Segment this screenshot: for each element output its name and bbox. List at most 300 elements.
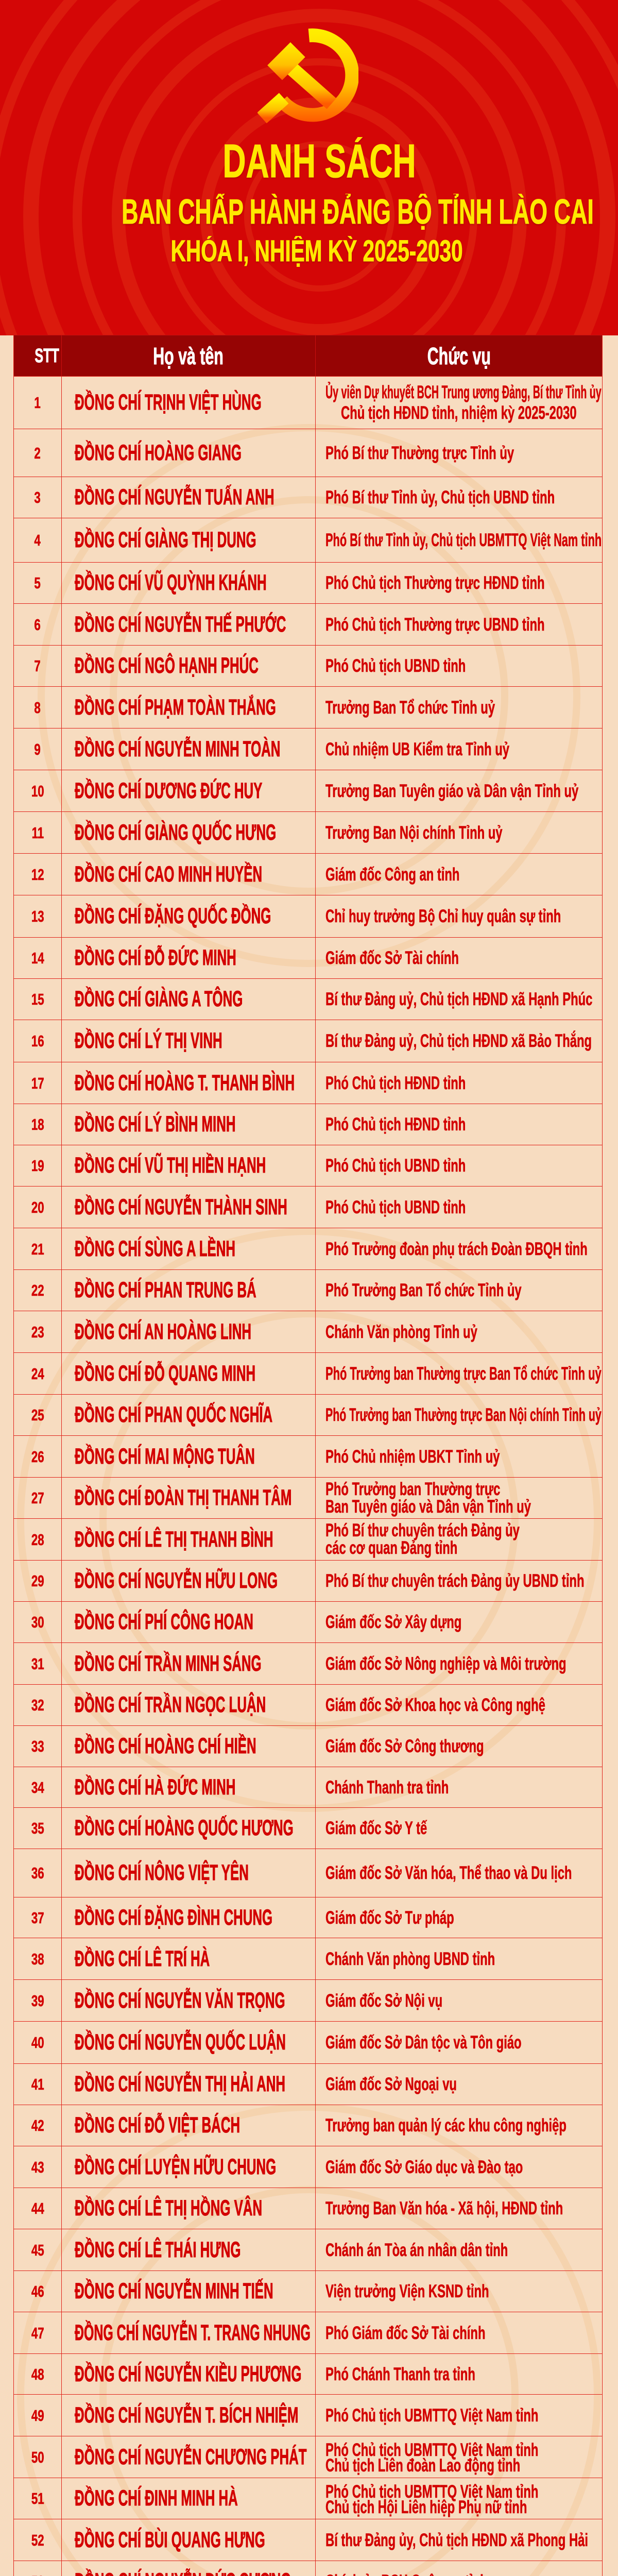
name (62, 979, 316, 1020)
stt: 16 (31, 1032, 44, 1050)
stt: 10 (31, 782, 44, 800)
row 30 (13, 1602, 603, 1643)
position: Phó Trưởng đoàn phụ trách Đoàn ĐBQH tỉnh (325, 1239, 588, 1259)
name (62, 1353, 316, 1394)
name (62, 518, 316, 562)
stt: 30 (31, 1613, 44, 1631)
stt (14, 2022, 62, 2063)
position: Phó Chủ tịch UBND tỉnh (325, 1197, 466, 1217)
name (62, 1062, 316, 1104)
stt (14, 2146, 62, 2188)
name: ĐỒNG CHÍ LÝ THỊ VINH (75, 1028, 222, 1053)
position: Giám đốc Sở Khoa học và Công nghệ (325, 1695, 545, 1715)
name (62, 1980, 316, 2021)
stt (14, 1104, 62, 1145)
position: Giám đốc Sở Dân tộc và Tôn giáo (325, 2032, 522, 2053)
name (62, 2105, 316, 2146)
stt: 5 (35, 574, 41, 592)
row 20 (13, 1187, 603, 1228)
row 25 (13, 1395, 603, 1436)
name (62, 1897, 316, 1938)
position: Chủ nhiệm UB Kiểm tra Tỉnh uỷ (325, 739, 509, 759)
stt: 25 (31, 1406, 44, 1424)
name (62, 2022, 316, 2063)
position: Trưởng Ban Nội chính Tỉnh uỷ (325, 822, 503, 843)
name: ĐỒNG CHÍ VŨ THỊ HIỀN HẠNH (75, 1153, 266, 1178)
position: Giám đốc Sở Giáo dục và Đào tạo (325, 2157, 523, 2177)
stt: 1 (35, 394, 41, 412)
stt: 26 (31, 1448, 44, 1465)
position: Phó Trưởng ban Thường trực Ban Tổ chức Tỉnh uỷ (325, 1363, 602, 1384)
position: Phó Chủ tịch UBMTTQ Việt Nam tỉnh (325, 2405, 538, 2426)
row 18 (13, 1104, 603, 1145)
position: Giám đốc Sở Nội vụ (325, 1991, 442, 2010)
row 10 (13, 770, 603, 812)
stt (14, 477, 62, 518)
stt: 17 (31, 1074, 44, 1092)
name (62, 938, 316, 978)
stt (14, 429, 62, 477)
stt: 4 (35, 531, 41, 549)
position (325, 1479, 531, 1517)
stt (14, 728, 62, 770)
name: ĐỒNG CHÍ NGUYỄN CHƯƠNG PHÁT (75, 2444, 306, 2469)
name: ĐỒNG CHÍ ĐẶNG QUỐC ĐỒNG (75, 904, 271, 928)
stt: 15 (31, 990, 44, 1008)
stt: 21 (31, 1240, 44, 1258)
stt: 23 (31, 1323, 44, 1341)
name: ĐỒNG CHÍ DƯƠNG ĐỨC HUY (75, 778, 262, 803)
stt (14, 2354, 62, 2394)
name (62, 604, 316, 645)
name: ĐỒNG CHÍ LÊ THỊ HỒNG VÂN (75, 2196, 262, 2221)
name: ĐỒNG CHÍ NÔNG VIỆT YÊN (75, 1860, 249, 1885)
position: Phó Chủ nhiệm UBKT Tỉnh uỷ (325, 1447, 500, 1466)
position: Phó Chủ tịch UBMTTQ Việt Nam tỉnh (325, 2482, 538, 2502)
name: ĐỒNG CHÍ LUYỆN HỮU CHUNG (75, 2155, 276, 2179)
position: Phó Chánh Thanh tra tỉnh (325, 2364, 475, 2384)
stt (14, 2105, 62, 2146)
stt (14, 1808, 62, 1849)
name (62, 854, 316, 895)
name (62, 770, 316, 811)
stt: 2 (35, 444, 41, 462)
position: Ban Tuyên giáo và Dân vận Tỉnh uỷ (325, 1497, 531, 1517)
name (62, 2519, 316, 2561)
name: ĐỒNG CHÍ ĐINH MINH HÀ (75, 2486, 238, 2511)
stt (14, 1020, 62, 1062)
stt: 27 (31, 1489, 44, 1507)
name: ĐỒNG CHÍ LÊ THÁI HƯNG (75, 2237, 241, 2262)
position: Chánh án Tòa án nhân dân tỉnh (325, 2240, 508, 2260)
stt: 33 (31, 1737, 44, 1755)
stt: 11 (31, 823, 44, 842)
name (62, 1519, 316, 1560)
stt: 43 (31, 2158, 44, 2176)
stt (14, 1938, 62, 1979)
name: ĐỒNG CHÍ PHẠM TOÀN THẮNG (75, 694, 276, 719)
stt (14, 2271, 62, 2312)
name (62, 1436, 316, 1477)
name: ĐỒNG CHÍ ĐẶNG ĐÌNH CHUNG (75, 1905, 272, 1930)
stt: 29 (31, 1572, 44, 1590)
name (62, 1602, 316, 1642)
stt (14, 1436, 62, 1477)
name: ĐỒNG CHÍ PHAN QUỐC NGHĨA (75, 1402, 272, 1427)
name (62, 2146, 316, 2188)
name (62, 1561, 316, 1601)
stt: 19 (31, 1157, 44, 1175)
name (62, 2188, 316, 2229)
position: Phó Trưởng ban Thường trực (325, 1479, 500, 1499)
name (62, 646, 316, 686)
position: Phó Chủ tịch UBND tỉnh (325, 1156, 466, 1176)
position (325, 381, 602, 423)
row 16 (13, 1020, 603, 1062)
stt: 45 (31, 2241, 44, 2259)
stt: 20 (31, 1198, 44, 1216)
position: Trưởng Ban Tổ chức Tỉnh uỷ (325, 698, 495, 717)
row 4 (13, 518, 603, 563)
position: Trưởng Ban Tuyên giáo và Dân vận Tỉnh uỷ (325, 781, 578, 801)
name (62, 895, 316, 937)
name (62, 687, 316, 728)
header: STT: STT (35, 345, 59, 367)
position: Giám đốc Sở Nông nghiệp và Môi trường (325, 1654, 566, 1673)
row 3 (13, 477, 603, 518)
row 44 (13, 2188, 603, 2229)
name (62, 1020, 316, 1062)
position: Chánh Văn phòng Tỉnh uỷ (325, 1322, 477, 1342)
name: ĐỒNG CHÍ NGUYỄN MINH TOÀN (75, 737, 280, 761)
name (62, 2271, 316, 2312)
name: ĐỒNG CHÍ PHÍ CÔNG HOAN (75, 1609, 253, 1634)
stt (14, 518, 62, 562)
name: ĐỒNG CHÍ GIÀNG QUỐC HƯNG (75, 820, 276, 845)
position: Phó Chủ tịch HĐND tỉnh (325, 1073, 466, 1093)
position: Ủy viên Dự khuyết BCH Trung ương Đảng, Bí thư Tỉnh ủy (325, 382, 602, 402)
row 27 (13, 1478, 603, 1519)
position: Trưởng ban quản lý các khu công nghiệp (325, 2115, 566, 2136)
name (62, 429, 316, 477)
stt: 35 (31, 1819, 44, 1837)
position: Phó Bí thư Tỉnh ủy, Chủ tịch UBND tỉnh (325, 487, 555, 507)
row 48 (13, 2354, 603, 2395)
name: ĐỒNG CHÍ NGUYỄN THỊ HẢI ANH (75, 2072, 285, 2096)
position: Chánh Văn phòng UBND tỉnh (325, 1948, 495, 1969)
position: Phó Bí thư chuyên trách Đảng ủy UBND tỉnh (325, 1571, 585, 1591)
stt (14, 938, 62, 978)
stt: 32 (31, 1696, 44, 1714)
name: ĐỒNG CHÍ HOÀNG T. THANH BÌNH (75, 1071, 295, 1095)
stt: 38 (31, 1950, 44, 1968)
name (62, 1228, 316, 1269)
stt (14, 1767, 62, 1807)
name: ĐỒNG CHÍ LÊ THỊ THANH BÌNH (75, 1527, 273, 1552)
stt (14, 1187, 62, 1228)
stt (14, 1980, 62, 2021)
stt (14, 2478, 62, 2519)
name: ĐỒNG CHÍ ĐỖ QUANG MINH (75, 1361, 255, 1386)
position: Giám đốc Sở Xây dựng (325, 1612, 461, 1632)
stt: 34 (31, 1778, 44, 1796)
stt: 6 (35, 615, 41, 634)
stt: 3 (35, 488, 41, 506)
name: ĐỒNG CHÍ TRẦN NGỌC LUẬN (75, 1692, 266, 1717)
stt (14, 2312, 62, 2353)
name (62, 1726, 316, 1767)
name (62, 1145, 316, 1186)
row 52 (13, 2519, 603, 2561)
name: ĐỒNG CHÍ NGÔ HẠNH PHÚC (75, 653, 259, 678)
name (62, 2436, 316, 2478)
position: Giám đốc Sở Y tế (325, 1818, 427, 1838)
name: ĐỒNG CHÍ HOÀNG QUỐC HƯƠNG (75, 1816, 294, 1840)
stt: 9 (35, 740, 41, 758)
row 49 (13, 2395, 603, 2436)
row 40 (13, 2022, 603, 2064)
stt (14, 2519, 62, 2561)
name: ĐỒNG CHÍ LÊ TRÍ HÀ (75, 1946, 210, 1971)
stt (14, 854, 62, 895)
stt (14, 377, 62, 429)
row 23 (13, 1311, 603, 1353)
position: Bí thư Đảng uỷ, Chủ tịch HĐND xã Hạnh Phúc (325, 989, 592, 1009)
stt: 47 (31, 2324, 44, 2342)
stt: 18 (31, 1115, 44, 1133)
position: Phó Chủ tịch UBMTTQ Việt Nam tỉnh (325, 2440, 538, 2460)
stt (14, 1897, 62, 1938)
row 5 (13, 563, 603, 604)
position: Phó Chủ tịch Thường trực HĐND tỉnh (325, 573, 545, 593)
stt: 22 (31, 1281, 44, 1299)
stt (14, 1849, 62, 1897)
stt: 12 (31, 866, 44, 883)
header: name: Họ và tên (153, 342, 224, 369)
name: ĐỒNG CHÍ VŨ QUỲNH KHÁNH (75, 570, 267, 595)
name: ĐỒNG CHÍ HOÀNG GIANG (75, 440, 242, 465)
stt (14, 1270, 62, 1311)
stt: 49 (31, 2406, 44, 2425)
header: position: Chức vụ (427, 342, 491, 369)
row 28 (13, 1519, 603, 1561)
drum pattern (0, 0, 618, 335)
name: ĐỒNG CHÍ NGUYỄN KIỀU PHƯƠNG (75, 2362, 301, 2386)
header banner (0, 0, 618, 335)
position: Chánh Thanh tra tỉnh (325, 1777, 449, 1797)
name (62, 728, 316, 770)
row 39 (13, 1980, 603, 2022)
name (62, 1849, 316, 1897)
row 34 (13, 1767, 603, 1808)
position: Chủ tịch Hội Liên hiệp Phụ nữ tỉnh (325, 2497, 527, 2517)
stt (14, 979, 62, 1020)
name: ĐỒNG CHÍ LÝ BÌNH MINH (75, 1112, 235, 1137)
stt: 39 (31, 1992, 44, 2009)
stt: 46 (31, 2282, 44, 2300)
name: ĐỒNG CHÍ MAI MỘNG TUÂN (75, 1444, 255, 1468)
stt (14, 2436, 62, 2478)
row 38 (13, 1938, 603, 1980)
row 15 (13, 979, 603, 1020)
header: name (62, 335, 316, 376)
name: ĐỒNG CHÍ NGUYỄN VĂN TRỌNG (75, 1988, 285, 2012)
name: ĐỒNG CHÍ ĐOÀN THỊ THANH TÂM (75, 1485, 291, 1510)
stt (14, 1395, 62, 1435)
icon: hammer and sickle (258, 28, 358, 124)
name (62, 1938, 316, 1979)
stt (14, 1643, 62, 1684)
stt (14, 1561, 62, 1601)
name: ĐỒNG CHÍ NGUYỄN T. TRANG NHUNG (75, 2320, 311, 2345)
stt (14, 1311, 62, 1352)
table header (13, 335, 603, 377)
name (62, 1478, 316, 1518)
stt: 8 (35, 699, 41, 716)
name: ĐỒNG CHÍ SÙNG A LỀNH (75, 1236, 235, 1261)
position: Phó Giám đốc Sở Tài chính (325, 2323, 485, 2343)
stt: 31 (31, 1655, 44, 1672)
stt: 14 (31, 949, 44, 967)
position: Chủ tịch Liên đoàn Lao động tỉnh (325, 2455, 520, 2476)
name: ĐỒNG CHÍ TRẦN MINH SÁNG (75, 1651, 262, 1675)
row 50 (13, 2436, 603, 2478)
stt (14, 1685, 62, 1725)
header: STT (14, 335, 62, 376)
stt (14, 2561, 62, 2576)
position: Giám đốc Sở Văn hóa, Thể thao và Du lịch (325, 1863, 572, 1883)
row 41 (13, 2064, 603, 2105)
row 53 (13, 2561, 603, 2576)
name: ĐỒNG CHÍ GIÀNG A TÔNG (75, 987, 243, 1011)
name (62, 2312, 316, 2353)
stt (14, 2395, 62, 2436)
position: Trưởng Ban Văn hóa - Xã hội, HĐND tỉnh (325, 2198, 563, 2218)
row 42 (13, 2105, 603, 2146)
row 1 (13, 377, 603, 429)
stt (14, 1353, 62, 1394)
name (62, 1808, 316, 1849)
position: Phó Bí thư chuyên trách Đảng ủy (325, 1520, 520, 1540)
name (62, 1395, 316, 1435)
position: Phó Chủ tịch Thường trực UBND tỉnh (325, 614, 545, 635)
stt: 37 (31, 1908, 44, 1927)
row 26 (13, 1436, 603, 1478)
name (62, 1311, 316, 1352)
stt (14, 770, 62, 811)
stt (14, 1478, 62, 1518)
stt: 44 (31, 2199, 44, 2217)
row 47 (13, 2312, 603, 2354)
row 46 (13, 2271, 603, 2312)
name (62, 2478, 316, 2519)
stt: 24 (31, 1364, 44, 1383)
stt (14, 1145, 62, 1186)
stt (14, 2229, 62, 2270)
stt (14, 2064, 62, 2105)
position: Phó Trưởng Ban Tổ chức Tỉnh ủy (325, 1280, 522, 1300)
stt (14, 1519, 62, 1560)
row 36 (13, 1849, 603, 1897)
stt: 13 (31, 907, 44, 925)
stt: 48 (31, 2365, 44, 2383)
row 8 (13, 687, 603, 728)
position: Giám đốc Sở Ngoại vụ (325, 2074, 457, 2094)
stt: 51 (31, 2489, 44, 2507)
name: ĐỒNG CHÍ TRỊNH VIỆT HÙNG (75, 390, 262, 415)
stt (14, 812, 62, 853)
position: Phó Bí thư Tỉnh ủy, Chủ tịch UBMTTQ Việt Nam tỉnh (325, 530, 602, 550)
stt (14, 1602, 62, 1642)
position: Giám đốc Công an tỉnh (325, 865, 459, 884)
name (62, 2561, 316, 2576)
stt: 28 (31, 1530, 44, 1549)
name (62, 2064, 316, 2105)
row 6 (13, 604, 603, 646)
name: ĐỒNG CHÍ NGUYỄN HỮU LONG (75, 1568, 278, 1593)
position: Chủ tịch HĐND tỉnh, nhiệm kỳ 2025-2030 (341, 403, 577, 423)
name: ĐỒNG CHÍ NGUYỄN QUỐC LUẬN (75, 2030, 286, 2055)
position: Giám đốc Sở Công thương (325, 1736, 484, 1756)
name: ĐỒNG CHÍ HOÀNG CHÍ HIỀN (75, 1734, 256, 1758)
name: ĐỒNG CHÍ AN HOÀNG LINH (75, 1319, 251, 1344)
name (62, 563, 316, 603)
row 13 (13, 895, 603, 938)
row 31 (13, 1643, 603, 1685)
position (316, 2478, 602, 2519)
name (62, 1767, 316, 1807)
position: các cơ quan Đảng tỉnh (325, 1538, 457, 1558)
stt: 42 (31, 2116, 44, 2134)
row 32 (13, 1685, 603, 1726)
row 12 (13, 854, 603, 895)
row 51 (13, 2478, 603, 2519)
row 45 (13, 2229, 603, 2271)
name (62, 2229, 316, 2270)
stt: 7 (35, 657, 41, 675)
row 11 (13, 812, 603, 854)
position (325, 1520, 520, 1558)
row 9 (13, 728, 603, 770)
stt: 41 (31, 2075, 44, 2093)
name: ĐỒNG CHÍ PHAN TRUNG BÁ (75, 1278, 256, 1302)
stt (14, 895, 62, 937)
position (316, 2436, 602, 2478)
row 24 (13, 1353, 603, 1395)
name: ĐỒNG CHÍ NGUYỄN THÀNH SINH (75, 1194, 287, 1219)
name: ĐỒNG CHÍ NGUYỄN T. BÍCH NHIỆM (75, 2403, 298, 2428)
name (62, 1187, 316, 1228)
position: Phó Bí thư Thường trực Tỉnh ủy (325, 443, 514, 463)
name: ĐỒNG CHÍ ĐỖ ĐỨC MINH (75, 945, 236, 970)
stt (14, 646, 62, 686)
row 35 (13, 1808, 603, 1849)
stt: 50 (31, 2448, 44, 2466)
name (62, 1104, 316, 1145)
name (62, 377, 316, 429)
name (62, 1270, 316, 1311)
row 2 (13, 429, 603, 477)
name (62, 1685, 316, 1725)
row 43 (13, 2146, 603, 2188)
row 21 (13, 1228, 603, 1270)
position: Phó Chủ tịch UBND tỉnh (325, 656, 466, 676)
row 33 (13, 1726, 603, 1767)
name: ĐỒNG CHÍ NGUYỄN THẾ PHƯỚC (75, 612, 286, 637)
name: ĐỒNG CHÍ BÙI QUANG HƯNG (75, 2528, 265, 2552)
row 29 (13, 1561, 603, 1602)
stt (14, 687, 62, 728)
